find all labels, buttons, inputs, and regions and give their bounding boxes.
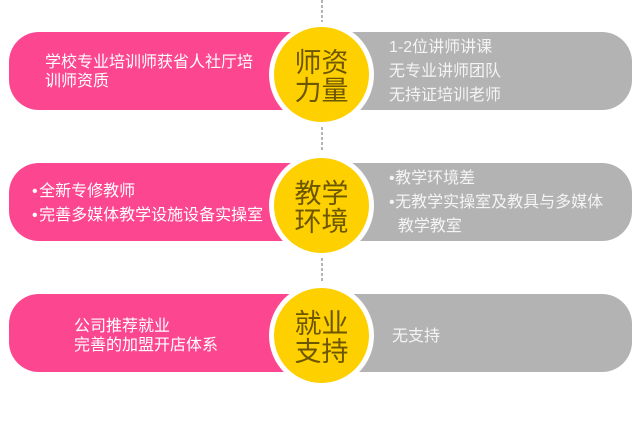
circle ring: support	[269, 283, 374, 388]
circle heading: teaching environment: 教学	[294, 179, 348, 209]
circle heading: support: 支持	[294, 337, 348, 367]
circle ring: teaching environment	[269, 153, 374, 258]
text: teaching staff advantage: 学校专业培训师获省人社厅培	[45, 54, 253, 71]
text: support advantage	[74, 317, 218, 354]
circle heading: teaching staff: 师资	[294, 48, 348, 78]
text: teaching staff advantage	[45, 53, 253, 90]
gray bar: teaching environment	[320, 163, 632, 241]
pink bar: teaching environment	[9, 163, 329, 241]
pink bar: teaching staff	[9, 32, 329, 110]
text: teaching staff advantage: 训师资质	[45, 73, 109, 90]
circle heading: support	[274, 288, 369, 383]
circle heading: support: 就业	[294, 309, 348, 339]
pink bar: support	[9, 294, 329, 372]
text: teaching environment competitor: 教学教室	[398, 218, 462, 235]
text: teaching environment competitor: •无教学实操室及教具与多媒体	[389, 194, 603, 211]
circle heading: teaching environment	[274, 158, 369, 253]
circle heading: teaching staff: 力量	[294, 76, 348, 106]
text: support advantage: 完善的加盟开店体系	[74, 337, 218, 354]
circle heading: teaching environment: 环境	[294, 207, 348, 237]
circle heading: teaching staff	[274, 27, 369, 122]
gray bar: teaching staff	[320, 32, 632, 110]
text: support advantage: 公司推荐就业	[74, 318, 170, 335]
text: teaching environment competitor: •教学环境差	[389, 170, 475, 187]
text: teaching environment advantage: •全新专修教师	[32, 183, 135, 200]
text: teaching environment advantage: •完善多媒体教学设施设备实操室	[32, 207, 263, 224]
text: teaching staff competitor: 无专业讲师团队	[389, 63, 501, 80]
text: teaching staff competitor	[389, 38, 501, 104]
circle ring: teaching staff	[269, 22, 374, 127]
text: teaching staff competitor: 无持证培训老师	[389, 87, 501, 104]
text: teaching environment competitor	[389, 169, 603, 235]
text: support competitor: 无支持	[392, 328, 440, 345]
text: teaching staff competitor: 1-2位讲师讲课	[389, 39, 492, 56]
gray bar: support	[320, 294, 632, 372]
text: teaching environment advantage	[32, 182, 263, 224]
